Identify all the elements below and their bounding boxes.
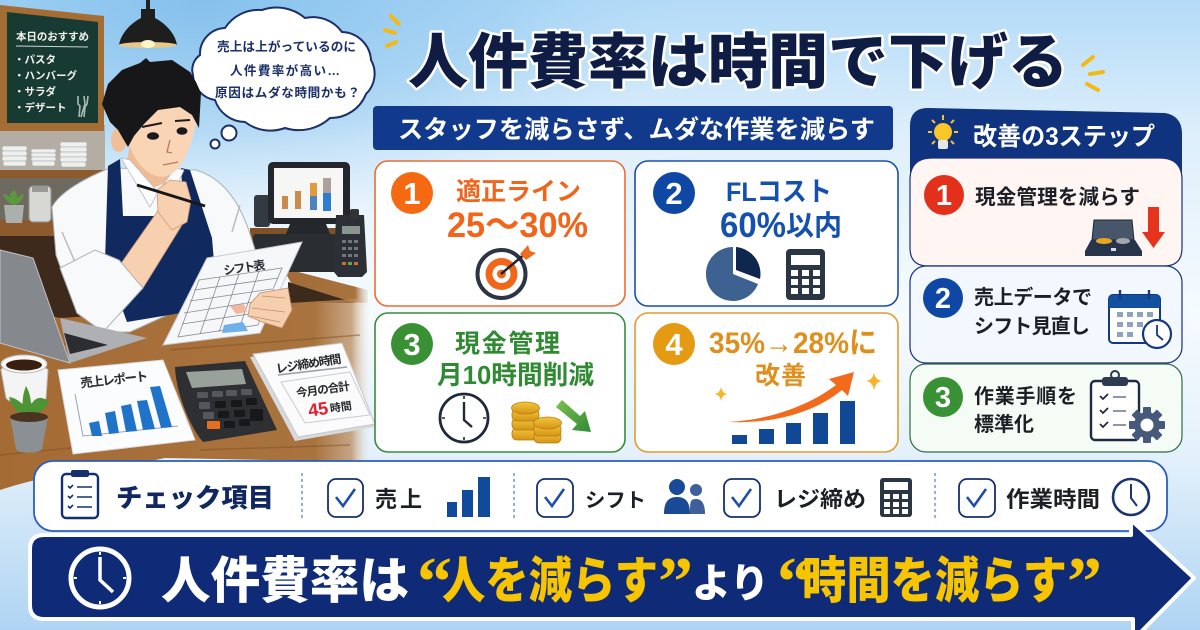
step 2: [910, 266, 1182, 363]
step 3: 作業手順を: [974, 385, 1077, 408]
checklist strip: [34, 461, 1167, 531]
badge 4: 4: [665, 327, 683, 362]
apron: [105, 159, 214, 322]
icon: clock: [71, 549, 129, 607]
face: [126, 95, 197, 177]
icon: clock: [440, 394, 488, 442]
chalkboard menu: ・パスタ: [14, 54, 56, 66]
register closing time notepad: 45: [307, 398, 329, 421]
check: sales: [328, 477, 490, 517]
subtitle banner: [373, 106, 893, 150]
badge 1: [391, 172, 433, 214]
title with accent marks: 人件費率は時間で下げる: [408, 29, 1068, 96]
check: register closing: レジ締め: [774, 487, 866, 512]
laptop: [0, 250, 147, 363]
register closing time notepad: [250, 343, 375, 441]
orange trend arrow: [728, 372, 854, 422]
chalkboard menu: 本日のおすすめ: [16, 30, 89, 43]
badge 2: 2: [665, 176, 683, 211]
thought bubble: 売上は上がっているのに: [217, 39, 356, 54]
conclusion arrow banner: 時間を減らす: [802, 553, 1067, 609]
ear: [111, 128, 127, 152]
card 2: FL cost: FLコスト: [726, 177, 832, 207]
check: working hours: [959, 479, 1149, 517]
icon: coin stacks: [512, 402, 562, 443]
shift table sheet: [163, 242, 302, 345]
step 2: 売上データで: [974, 285, 1092, 309]
panel header: [910, 108, 1182, 175]
icon: calendar with clock: [1109, 290, 1171, 348]
conclusion arrow banner: “: [777, 544, 812, 621]
badge 3: 3: [403, 327, 421, 362]
step 1: 1: [936, 180, 952, 212]
conclusion arrow banner: ”: [1067, 544, 1102, 621]
desk calculator: [175, 361, 277, 442]
conclusion arrow banner: ”: [658, 544, 693, 621]
sparkles: [715, 372, 882, 401]
panel header: 改善の3ステップ: [973, 123, 1155, 151]
step 2: 2: [935, 283, 951, 315]
icon: red down arrow: [1142, 207, 1165, 248]
card 3: cash handling: [375, 313, 625, 452]
hair: [102, 58, 201, 147]
step 1: [910, 158, 1182, 266]
hand holding sheet: [248, 288, 292, 328]
step 3: [910, 364, 1182, 452]
thought bubble: 人件費率が高い…: [230, 63, 340, 78]
badge 1: 1: [403, 176, 421, 211]
chalkboard menu: ・ハンバーグ: [14, 69, 77, 82]
step 2: シフト見直し: [974, 315, 1090, 338]
thought bubble: 原因はムダな時間かも？: [215, 85, 360, 100]
check: shift: シフト: [585, 490, 646, 512]
icon: clipboard: [62, 470, 98, 518]
badge 3: [391, 323, 433, 365]
check: working hours: 作業時間: [1006, 487, 1100, 512]
register closing time notepad: レジ締め時間: [275, 351, 342, 376]
shirt: [52, 168, 262, 332]
badge 2: [653, 172, 695, 214]
icon: green down arrow: [556, 400, 591, 432]
chalkboard menu: [0, 5, 104, 131]
step 3: 3: [935, 382, 951, 414]
icon: target and arrow: [478, 245, 536, 298]
neck: [126, 145, 178, 190]
subtitle banner: スタッフを減らさず、ムダな作業を減らす: [398, 115, 875, 144]
chalkboard menu: ・デザート: [14, 101, 66, 114]
sales report sheet: 売上レポート: [80, 368, 149, 391]
man in apron: [52, 58, 262, 332]
wood counter: [0, 225, 370, 490]
card 4: improvement: 35%→28%に: [709, 327, 877, 360]
card 3: cash handling: 現金管理: [455, 330, 560, 358]
bar chart rising: [732, 401, 855, 444]
POS terminal: [253, 162, 367, 277]
illustration: restaurant owner at counter: [0, 0, 700, 490]
card 1: target line: 25～30%: [447, 206, 588, 245]
card 1: target line: [375, 161, 625, 306]
forearm and hand with pen: [120, 196, 190, 288]
thought bubble: [192, 8, 375, 148]
gear: [1129, 407, 1165, 443]
chalkboard menu: ・サラダ: [14, 85, 56, 98]
step 3: 標準化: [974, 413, 1034, 436]
icon: pie chart: [706, 247, 760, 301]
coffee cup: [1, 355, 48, 403]
pendant lamp: [119, 0, 177, 48]
collar: [121, 158, 158, 207]
card 1: target line: 適正ライン: [456, 178, 581, 206]
card 4: improvement: [635, 313, 898, 452]
step 1: 現金管理を減らす: [975, 185, 1140, 209]
eyes: [147, 132, 159, 140]
check: shift: [537, 479, 705, 517]
check: sales: 売上: [375, 487, 422, 512]
icon: cash tray: [1085, 220, 1142, 256]
conclusion arrow banner: 人を減らす: [442, 553, 658, 609]
back wall shelves: [0, 125, 105, 240]
conclusion arrow banner: [30, 520, 1194, 630]
panel: 3 improvement steps: [910, 108, 1182, 452]
checklist strip: チェック項目: [116, 483, 274, 513]
card 4: improvement: 改善: [755, 362, 806, 390]
conclusion arrow banner: より: [692, 562, 769, 606]
card 2: FL cost: 60%: [720, 206, 786, 245]
check: register closing: [724, 478, 912, 517]
card 2: FL cost: 以内: [786, 210, 842, 241]
card 2: FL cost: [635, 161, 898, 306]
icon: calculator: [786, 249, 825, 300]
register closing time notepad: 時間: [329, 398, 353, 415]
sales report sheet: [58, 360, 195, 454]
shirt cuff: [60, 250, 143, 332]
conclusion arrow banner: “: [417, 544, 452, 621]
icon: clipboard with gear: [1091, 371, 1165, 443]
shift table sheet: シフト表: [222, 257, 266, 278]
card 3: cash handling: 月10時間削減: [437, 360, 594, 390]
potted plant: [9, 386, 49, 453]
register closing time notepad: 今月の合計: [295, 379, 351, 400]
conclusion arrow banner: 人件費率は: [161, 553, 409, 609]
badge 4: [653, 323, 695, 365]
